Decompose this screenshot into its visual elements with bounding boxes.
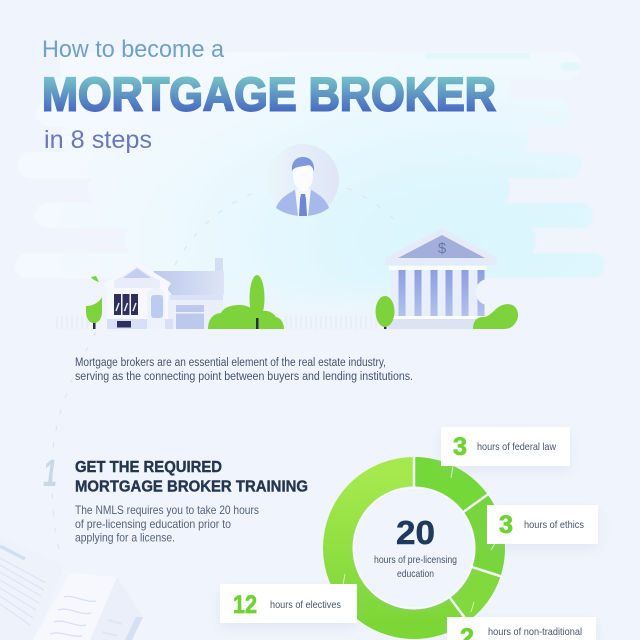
intro text: [75, 357, 413, 383]
donut chart: 20 hours: [338, 455, 505, 624]
book illustration: [0, 537, 143, 640]
bank illustration: $: [438, 240, 447, 257]
card: federal law: hours of federal law: [477, 441, 556, 453]
intro text: Mortgage brokers are an essential element of the real estate industry,: [75, 357, 386, 369]
card: ethics: 3: [499, 511, 513, 539]
donut centre value: education: [397, 568, 434, 580]
card: non-traditional: hours of non-traditional: [488, 626, 582, 638]
bush right of bank: [473, 304, 518, 329]
step 1 text: applying for a license.: [75, 530, 175, 544]
intro text: serving as the connecting point between buyers and lending institutions.: [75, 371, 413, 383]
fence: [57, 316, 376, 329]
title: MORTGAGE BROKER: [42, 68, 496, 120]
card: federal law: 3: [453, 433, 467, 461]
donut centre value: [374, 514, 457, 580]
donut centre value: 20: [396, 514, 435, 551]
card: ethics: hours of ethics: [524, 519, 584, 531]
card: ethics: [487, 505, 598, 544]
tree left of house: [86, 276, 102, 329]
bank illustration: [385, 228, 497, 329]
dashed connector paths: [52, 188, 401, 560]
step 1 heading: 1: [43, 453, 57, 495]
step 1 heading: MORTGAGE BROKER TRAINING: [75, 478, 308, 496]
bushes and tall tree: [208, 275, 284, 329]
card: electives: 12: [233, 591, 257, 619]
title: [42, 36, 496, 154]
card: federal law: [441, 427, 570, 466]
title: in 8 steps: [44, 126, 152, 154]
donut centre value: hours of pre-licensing: [374, 554, 457, 566]
card: non-traditional: [447, 617, 596, 640]
clouds backdrop: [15, 52, 605, 332]
tree left of bank: [376, 296, 394, 329]
step 1 text: [75, 503, 259, 544]
step 1 heading: [43, 453, 308, 496]
step 1 text: The NMLS requires you to take 20 hours: [75, 503, 259, 517]
avatar: broker: [267, 144, 339, 216]
step 1 heading: GET THE REQUIRED: [75, 459, 222, 476]
house illustration: [103, 258, 224, 329]
card: electives: [220, 584, 357, 623]
step 1 text: of pre-licensing education prior to: [75, 517, 231, 531]
title: How to become a: [42, 36, 224, 63]
cloud notch over bank: [476, 279, 640, 305]
card: electives: hours of electives: [270, 599, 341, 611]
